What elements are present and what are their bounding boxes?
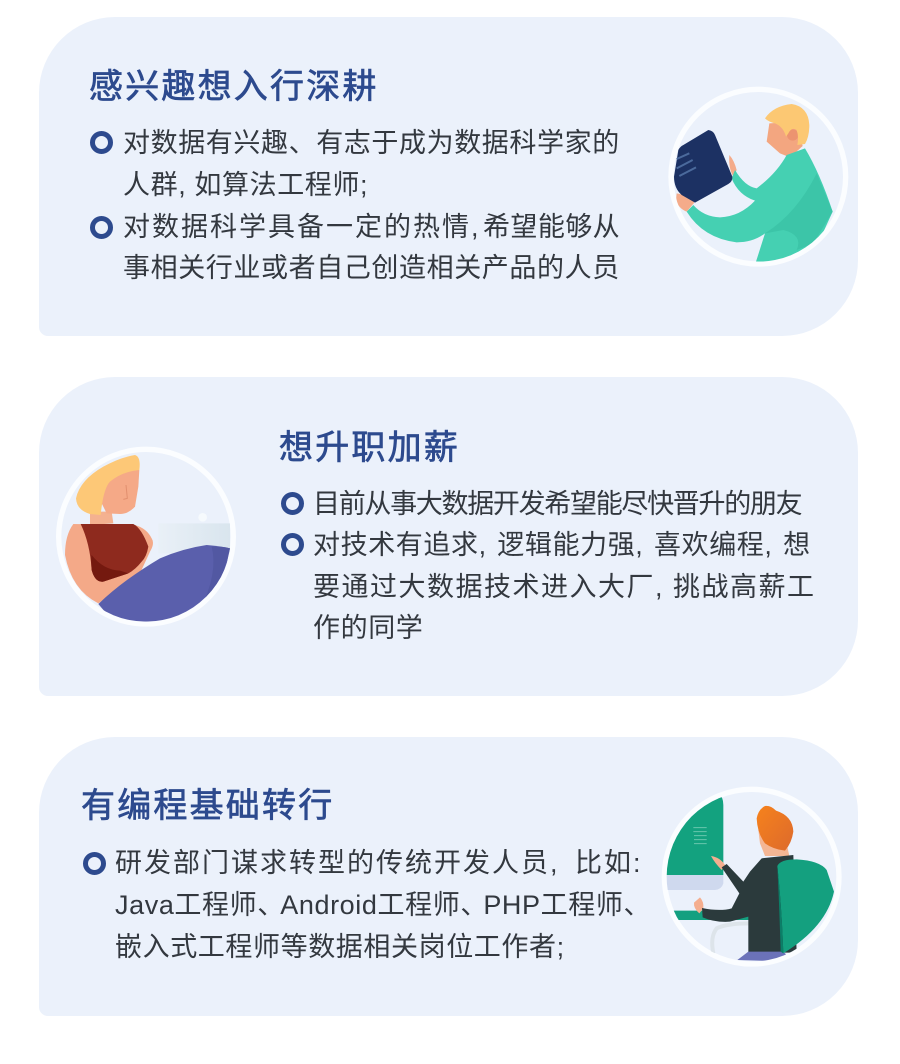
text: bullet 1 line 1: 对数据有兴趣、有志于成为数据科学家的 (123, 128, 620, 158)
text: bullet 1: 目前从事大数据开发希望能尽快晋升的朋友 (313, 489, 801, 519)
text: line 2: Java工程师、Android工程师、PHP工程师、 (115, 890, 646, 920)
text: bullet 2 line 1: 对数据科学具备一定的热情, 希望能够从 (123, 212, 620, 242)
heading: career change with programming background: 有编程基础转行 (81, 787, 334, 825)
text: bullet 2 line 3: 作的同学 (313, 613, 423, 643)
bullet 2 (90, 216, 113, 239)
icon: woman lying with laptop (59, 449, 233, 624)
icon: developer at computer (660, 789, 839, 964)
text: bullet 2 line 2: 要通过大数据技术进入大厂, 挑战高薪工 (313, 572, 816, 602)
heading: promotion and pay rise: 想升职加薪 (279, 429, 460, 467)
text: line 1: 研发部门谋求转型的传统开发人员, 比如: (115, 848, 643, 878)
text: bullet 2 line 2: 事相关行业或者自己创造相关产品的人员 (123, 253, 620, 283)
text: bullet 1 line 2: 人群, 如算法工程师; (123, 170, 368, 200)
panel: career change with programming background (39, 737, 858, 1016)
bullet 2 (281, 533, 304, 556)
bullet 1 (83, 852, 106, 875)
bullet 1 (281, 492, 304, 515)
panel: interested in the field (39, 17, 858, 336)
text: line 3: 嵌入式工程师等数据相关岗位工作者; (115, 932, 565, 962)
bullet 1 (90, 131, 113, 154)
panel: promotion and pay rise (39, 377, 858, 696)
heading: interested in the field: 感兴趣想入行深耕 (89, 68, 379, 106)
icon: man holding tablet (671, 89, 846, 264)
text: bullet 2 line 1: 对技术有追求, 逻辑能力强, 喜欢编程, 想 (313, 530, 811, 560)
